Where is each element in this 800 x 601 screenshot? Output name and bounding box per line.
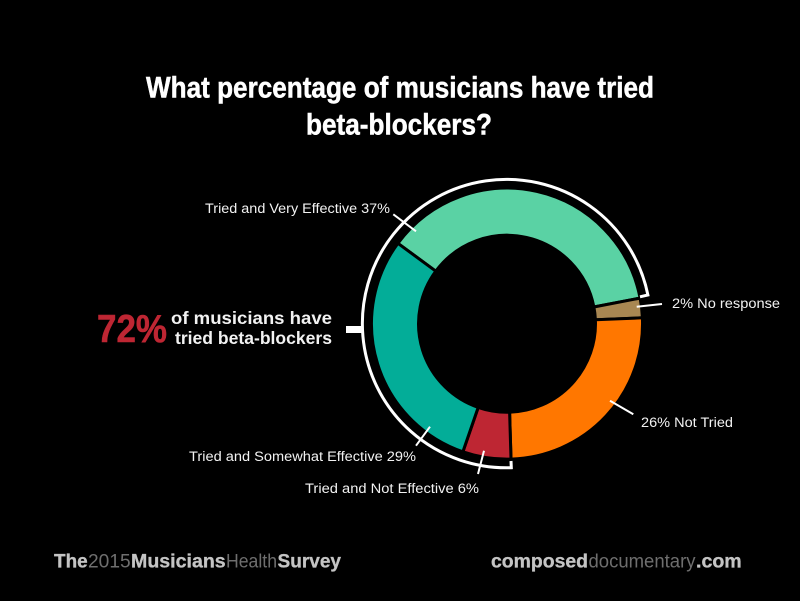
bracket: 72% tried — [346, 179, 648, 468]
footer: survey name: The — [54, 552, 88, 573]
callout: 72% of musicians: of musicians have — [171, 308, 332, 328]
footer: survey name: Musicians — [131, 552, 226, 573]
footer: website: .com — [696, 552, 742, 573]
footer: survey name: Survey — [278, 552, 341, 573]
label: tried and somewhat effective: Tried and Somewhat Effective 29% — [189, 449, 416, 464]
label: not tried — [610, 401, 733, 430]
segment: tried and very effective 37% — [398, 188, 640, 307]
label: tried and somewhat effective — [189, 427, 430, 464]
footer: website: composed — [491, 552, 588, 573]
callout: 72% of musicians — [97, 308, 332, 351]
footer: survey name — [54, 552, 341, 573]
segment: no response 2% — [594, 298, 642, 320]
callout: 72% of musicians: 72% — [97, 308, 167, 351]
footer: survey name: Health — [226, 552, 277, 573]
footer: website — [491, 552, 742, 573]
segment: tried and not effective 6% — [463, 407, 511, 459]
title — [146, 72, 654, 142]
footer: survey name: 2015 — [88, 552, 131, 573]
label: tried and not effective — [305, 451, 484, 496]
label: tried and very effective: Tried and Very Effective 37% — [205, 201, 390, 216]
donut chart — [371, 188, 643, 459]
callout: 72% of musicians: tried beta-blockers — [175, 328, 332, 348]
segment: not tried 26% — [510, 318, 643, 459]
segment: tried and somewhat effective 29% — [371, 243, 478, 452]
label: not tried: 26% Not Tried — [641, 415, 733, 430]
footer: website: documentary — [588, 552, 696, 573]
label: tried and not effective: Tried and Not Effective 6% — [305, 481, 479, 496]
label: no response: 2% No response — [672, 296, 780, 311]
title: beta-blockers? — [306, 108, 492, 142]
label: tried and very effective — [205, 201, 416, 231]
title: What percentage of musicians have tried — [146, 72, 654, 104]
